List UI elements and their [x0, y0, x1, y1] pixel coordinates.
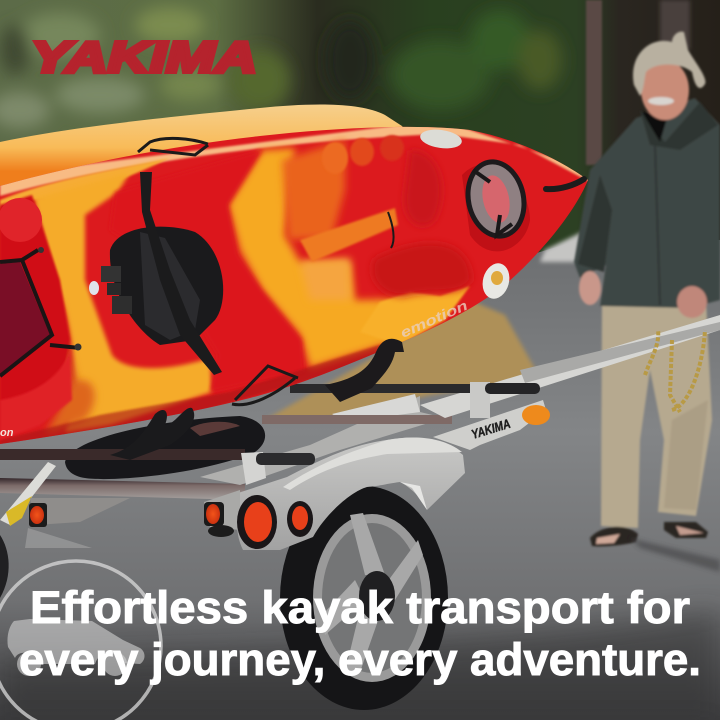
nose recess: [462, 164, 530, 251]
headline: every journey, every adventure.: [19, 634, 701, 685]
side handle: [232, 366, 298, 405]
brown rail: [262, 415, 452, 424]
moustache: [648, 97, 674, 105]
strap on thigh brace: [388, 212, 394, 248]
shadow on road: [630, 538, 720, 572]
footwell scallops: [322, 142, 348, 174]
handle bar right: [290, 382, 540, 418]
brand on plate: YAKIMA: [469, 416, 512, 442]
badge ring: [0, 561, 161, 720]
right tail lamp: [287, 501, 313, 537]
wheel: [280, 486, 448, 710]
upper well: [404, 150, 442, 226]
kayak cradle right: [325, 339, 404, 402]
yellow band behind seat: [34, 172, 212, 432]
trousers: [601, 300, 712, 528]
badge top: [419, 127, 463, 151]
fender: [237, 438, 465, 550]
tongue: [420, 315, 720, 418]
man standing by the trailer: [574, 32, 720, 572]
hands: [579, 271, 601, 305]
carry handle top: [138, 138, 208, 155]
badge side: [479, 260, 513, 302]
small lamp: [204, 490, 240, 537]
headline: [19, 582, 701, 685]
amber lamp: [522, 405, 550, 425]
rear cockpit hatch net: [0, 247, 82, 376]
left tyre: [0, 535, 9, 598]
background: road: [0, 240, 720, 720]
background: dry grass: [265, 300, 540, 420]
rim highlight: [0, 120, 590, 196]
deck plate: [200, 396, 445, 485]
trailer: [0, 315, 720, 710]
round hatch: [458, 154, 534, 244]
seat pad: [101, 172, 223, 375]
orange footwell: [282, 140, 345, 240]
red behind seat: [110, 150, 304, 392]
sandals: [590, 522, 708, 546]
centre yellow band: [228, 148, 445, 368]
kayak cradle left: [110, 408, 194, 460]
spokes: [322, 513, 423, 672]
headline: Effortless kayak transport for: [30, 582, 690, 633]
lower well: [372, 243, 472, 296]
small sticker: [89, 281, 99, 295]
hull sticker name fragment: on: [0, 427, 14, 439]
kayak main hull: [0, 126, 588, 444]
background: forest: [0, 0, 720, 300]
thigh brace: [300, 208, 398, 262]
kayak fittings: [0, 127, 584, 439]
road light edge: [540, 232, 582, 262]
diagonal frame: [0, 462, 56, 525]
hair: [633, 32, 705, 96]
Yakima logo: YAKIMA: [31, 33, 257, 82]
spare wheel under kayak: [65, 416, 265, 479]
rear cross bar: [30, 498, 130, 525]
handle bar left: [241, 452, 315, 485]
head: [641, 60, 689, 120]
chain: [645, 330, 705, 412]
road shadow at bottom: [0, 610, 720, 720]
cockpit: [0, 194, 72, 399]
bow handle: [546, 179, 584, 189]
big tail lamp: [237, 495, 277, 549]
kayak upper hull: [0, 105, 420, 200]
tongue plate: [433, 400, 550, 450]
side scallops: [360, 286, 470, 345]
upper rail: [0, 449, 245, 460]
badge vehicle icon: [7, 619, 144, 676]
jacket: [574, 98, 720, 308]
lower dark edge: [0, 343, 382, 444]
hull name label: emotion: [398, 297, 470, 341]
rear-left lamp: [29, 503, 47, 527]
yellow rim left: [0, 158, 170, 208]
